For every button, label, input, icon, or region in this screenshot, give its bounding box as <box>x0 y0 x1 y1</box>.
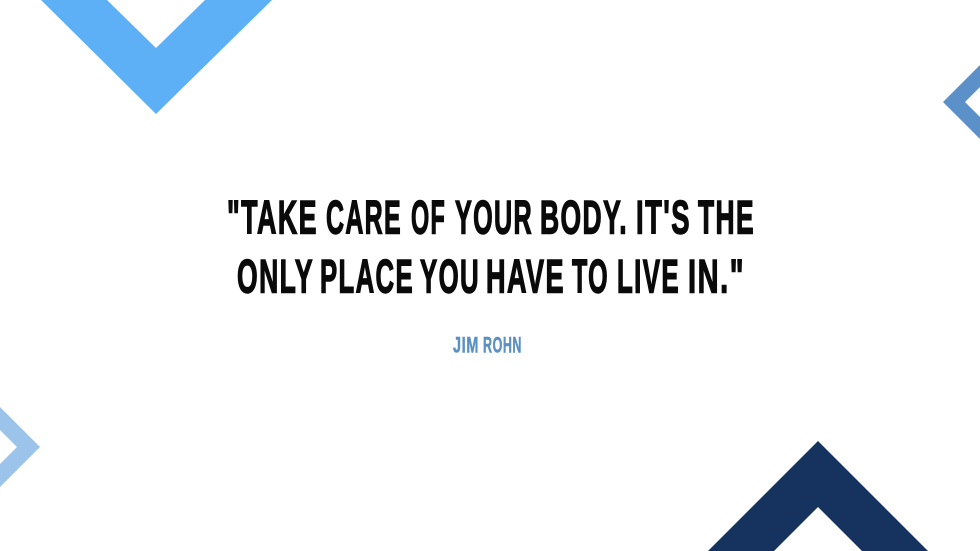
quote line 2: IN." <box>688 250 745 302</box>
quote line 1 <box>227 190 755 244</box>
author attribution: ROHN <box>483 332 522 358</box>
quote line 1: IT'S <box>636 190 691 244</box>
quote line 2: PLACE <box>320 250 414 302</box>
quote line 2 <box>237 250 745 302</box>
icon: right mid blue chevron pointing left <box>943 65 980 139</box>
icon: top light blue chevron pointing down <box>41 0 272 114</box>
quote line 1: "TAKE <box>227 190 318 244</box>
quote line 2: ONLY <box>237 250 314 302</box>
quote line 1: YOUR <box>455 190 533 244</box>
quote line 2: TO <box>572 250 609 302</box>
quote line 1: BODY. <box>540 190 628 244</box>
icon: bottom navy chevron pointing up <box>708 441 928 551</box>
author attribution: JIM <box>453 332 479 358</box>
quote line 1: CARE <box>326 190 402 244</box>
icon: left pale blue chevron pointing right <box>0 407 40 487</box>
quote line 2: HAVE <box>486 250 565 302</box>
quote line 1: OF <box>411 190 446 244</box>
quote line 1: THE <box>698 190 755 244</box>
author attribution <box>453 332 522 358</box>
quote line 2: LIVE <box>617 250 680 302</box>
quote line 2: YOU <box>420 250 480 302</box>
quote text <box>227 190 755 302</box>
